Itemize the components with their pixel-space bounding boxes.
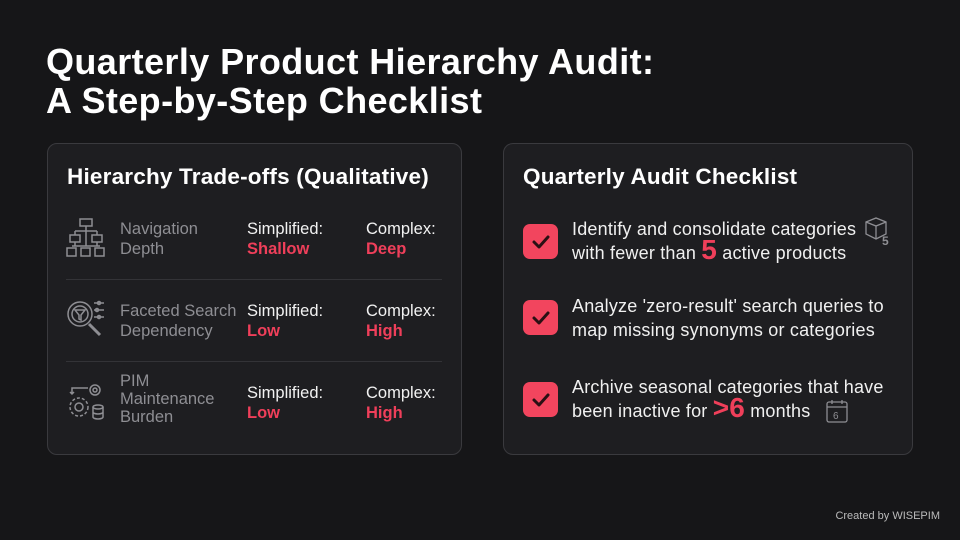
footer credit: Created by WISEPIM <box>835 510 940 522</box>
title: Quarterly Product Hierarchy Audit: <box>46 41 654 82</box>
icon: gears and database <box>69 384 104 420</box>
row label: PIM <box>120 372 214 426</box>
row values: PIM complex: High <box>366 404 403 422</box>
row values: PIM simplified: Low <box>247 404 280 422</box>
row label: faceted search: Faceted Search <box>120 302 236 320</box>
row label: PIM: PIM <box>120 372 149 390</box>
icon: faceted search <box>67 300 104 336</box>
row values: navigation simplified: Shallow <box>247 240 309 258</box>
checkbox 1 <box>523 224 558 259</box>
row label: PIM: Burden <box>120 408 173 426</box>
item 2 text: map missing synonyms or categories <box>572 320 875 340</box>
row label: PIM: Maintenance <box>120 390 214 408</box>
item 2 text <box>572 296 884 340</box>
row values: faceted simplified: Low <box>247 322 280 340</box>
row label: faceted search: Dependency <box>120 322 213 340</box>
panel: checklist <box>503 143 913 455</box>
row label: navigation <box>120 220 198 258</box>
row values: faceted simplified: Simplified: <box>247 302 323 320</box>
item 1 text: with fewer than 5 active products <box>572 234 846 265</box>
row values: navigation simplified <box>247 220 323 258</box>
item 1 text: Identify and consolidate categories <box>572 219 856 239</box>
row values: PIM complex <box>366 384 436 422</box>
icon: calendar 6: 6 <box>833 411 839 422</box>
row label: navigation: Depth <box>120 240 164 258</box>
row label: faceted search <box>120 302 236 340</box>
row values: faceted simplified <box>247 302 323 340</box>
icon: calendar 6 <box>826 400 848 423</box>
row values: navigation complex <box>366 220 436 258</box>
row values: PIM complex: Complex: <box>366 384 436 402</box>
item 3 text: Archive seasonal categories that have <box>572 377 884 397</box>
row values: faceted complex: High <box>366 322 403 340</box>
panel heading: Quarterly Audit Checklist <box>523 164 797 189</box>
panel: trade-offs <box>47 143 462 455</box>
item 1 text <box>572 219 856 265</box>
row values: PIM simplified: Simplified: <box>247 384 323 402</box>
row values: navigation simplified: Simplified: <box>247 220 323 238</box>
row values: faceted complex: Complex: <box>366 302 436 320</box>
item 2 text: Analyze 'zero-result' search queries to <box>572 296 884 316</box>
row label: navigation: Navigation <box>120 220 198 238</box>
title <box>46 41 654 121</box>
row values: faceted complex <box>366 302 436 340</box>
icon: box 5 <box>865 217 889 246</box>
checkbox 2 <box>523 300 558 335</box>
row values: navigation complex: Deep <box>366 240 406 258</box>
row values: navigation complex: Complex: <box>366 220 436 238</box>
panel heading: Hierarchy Trade-offs (Qualitative) <box>67 164 429 189</box>
title: A Step-by-Step Checklist <box>46 80 482 121</box>
checkbox 3 <box>523 382 558 417</box>
icon: hierarchy <box>66 218 105 257</box>
item 3 text <box>572 377 884 423</box>
item 3 text: been inactive for >6 months <box>572 392 810 423</box>
row values: PIM simplified <box>247 384 323 422</box>
